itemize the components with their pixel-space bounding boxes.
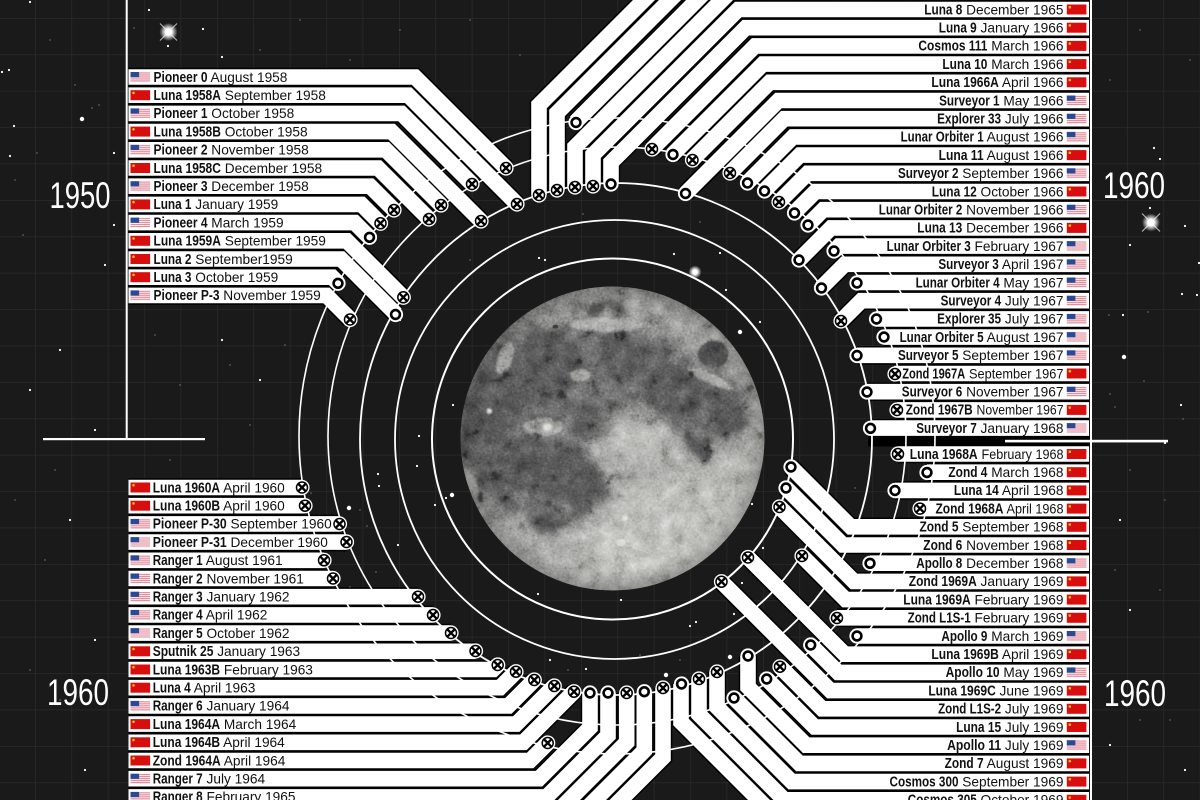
Pioneer 2: Pioneer 2 November 1958 xyxy=(154,143,309,159)
Lunar Orbiter 3: Lunar Orbiter 3 February 1967 xyxy=(887,239,1064,255)
Luna 4: Luna 4 April 1963 xyxy=(153,680,256,696)
Luna 1964B xyxy=(128,684,582,751)
Luna 3 xyxy=(128,270,346,291)
Lunar Orbiter 5: Lunar Orbiter 5 August 1967 xyxy=(900,330,1064,346)
Zond 1968A: Zond 1968A April 1968 xyxy=(935,501,1064,517)
Pioneer 4 xyxy=(128,215,377,245)
Surveyor 3 xyxy=(814,257,1089,296)
Zond L1S-1: Zond L1S-1 February 1969 xyxy=(908,611,1064,627)
Apollo 9: Apollo 9 March 1969 xyxy=(941,629,1064,645)
Explorer 33: Explorer 33 July 1966 xyxy=(937,112,1064,128)
off-page band E xyxy=(674,676,766,800)
year label: 1960 lower right: 1960 xyxy=(1104,673,1166,714)
Luna 12 xyxy=(787,184,1089,221)
Sputnik 25 xyxy=(128,643,483,660)
Pioneer 2 xyxy=(128,143,449,213)
Ranger 8 xyxy=(128,685,616,800)
Ranger 5 xyxy=(128,625,459,642)
moon xyxy=(457,286,765,591)
boundary line: left vertical xyxy=(126,0,128,440)
Surveyor 5: Surveyor 5 September 1967 xyxy=(898,348,1064,364)
Ranger 5: Ranger 5 October 1962 xyxy=(153,626,289,642)
Surveyor 6 xyxy=(859,384,1089,400)
Surveyor 1 xyxy=(678,93,1089,201)
Luna 8: Luna 8 December 1965 xyxy=(924,2,1064,18)
Zond 4: Zond 4 March 1968 xyxy=(948,465,1064,481)
Zond 1964A: Zond 1964A April 1964 xyxy=(153,753,286,769)
Zond 6: Zond 6 November 1968 xyxy=(923,538,1064,554)
Surveyor 1: Surveyor 1 May 1966 xyxy=(939,93,1064,109)
year label: 1950: 1950 xyxy=(50,175,110,216)
Pioneer P-31: Pioneer P-31 December 1960 xyxy=(153,535,328,551)
Zond 5 xyxy=(783,459,1089,536)
off-page band F xyxy=(562,685,634,800)
Luna 9: Luna 9 January 1966 xyxy=(939,20,1064,36)
Luna 1963B xyxy=(128,657,505,678)
Luna 3: Luna 3 October 1959 xyxy=(154,270,278,286)
missions 1968-1969 xyxy=(674,446,1089,800)
Zond L1S-2 xyxy=(772,659,1089,718)
Surveyor 2: Surveyor 2 September 1966 xyxy=(898,166,1064,182)
Luna 1960B: Luna 1960B April 1960 xyxy=(153,498,285,514)
Apollo 11 xyxy=(740,648,1089,754)
Sputnik 25: Sputnik 25 January 1963 xyxy=(153,644,301,660)
Pioneer 1 xyxy=(128,106,480,192)
Apollo 10 xyxy=(803,637,1089,681)
Lunar Orbiter 2: Lunar Orbiter 2 November 1966 xyxy=(879,202,1064,218)
Luna 1964B: Luna 1964B April 1964 xyxy=(153,735,285,751)
Surveyor 4: Surveyor 4 July 1967 xyxy=(941,294,1064,310)
Luna 13: Luna 13 December 1966 xyxy=(917,221,1064,237)
Luna 11 xyxy=(757,148,1089,199)
Zond 1969A: Zond 1969A January 1969 xyxy=(909,574,1064,590)
Pioneer P-3 xyxy=(128,288,358,327)
Explorer 35: Explorer 35 July 1967 xyxy=(937,312,1064,328)
Ranger 6 xyxy=(128,672,542,715)
Zond L1S-2: Zond L1S-2 July 1969 xyxy=(938,702,1064,718)
Luna 14 xyxy=(887,483,1089,499)
Lunar Orbiter 1 xyxy=(740,130,1089,191)
Pioneer 3 xyxy=(128,179,402,218)
Ranger 2: Ranger 2 November 1961 xyxy=(153,571,304,587)
Ranger 3: Ranger 3 January 1962 xyxy=(153,590,289,606)
star sparkle upper left xyxy=(160,23,178,41)
Cosmos 111 xyxy=(644,39,1089,157)
Pioneer 0 xyxy=(128,70,514,176)
Luna 1969A: Luna 1969A February 1969 xyxy=(903,592,1064,608)
Luna 15 xyxy=(759,671,1089,736)
Luna 9 xyxy=(603,20,1089,192)
Apollo 9 xyxy=(849,628,1089,645)
Apollo 8 xyxy=(862,556,1089,572)
Surveyor 4 xyxy=(833,294,1089,329)
off-page band A xyxy=(531,0,664,203)
Surveyor 3: Surveyor 3 April 1967 xyxy=(938,257,1064,273)
Ranger 4: Ranger 4 April 1962 xyxy=(153,608,267,624)
Luna 1959A xyxy=(128,234,411,305)
Luna 1958C xyxy=(128,161,437,227)
off-page band D xyxy=(567,0,1089,195)
off-page band G xyxy=(588,684,652,800)
star sparkle centre xyxy=(688,266,702,278)
Cosmos 305 xyxy=(691,671,1089,800)
Lunar Orbiter 3 xyxy=(826,239,1089,259)
decade tick right xyxy=(1005,440,1168,442)
Pioneer 3: Pioneer 3 December 1958 xyxy=(154,179,309,195)
Lunar Orbiter 1: Lunar Orbiter 1 August 1966 xyxy=(901,130,1064,146)
Zond 6 xyxy=(778,480,1089,554)
Surveyor 5 xyxy=(849,348,1089,364)
Luna 1960A: Luna 1960A April 1960 xyxy=(153,480,285,496)
missions 1960-1965 xyxy=(128,480,671,800)
orbit rings around the moon xyxy=(299,118,935,754)
missions 1958-1959 xyxy=(128,70,525,327)
Luna 10: Luna 10 March 1966 xyxy=(942,57,1064,73)
Pioneer P-3: Pioneer P-3 November 1959 xyxy=(154,288,321,304)
Luna 1969C: Luna 1969C June 1969 xyxy=(928,683,1064,699)
Surveyor 7 xyxy=(863,421,1089,437)
Zond 5: Zond 5 September 1968 xyxy=(919,520,1064,536)
Luna 1969A xyxy=(794,548,1089,608)
Pioneer 0: Pioneer 0 August 1958 xyxy=(154,70,288,86)
off-page band H xyxy=(614,680,671,800)
Explorer 33 xyxy=(722,112,1089,181)
Explorer 35 xyxy=(869,311,1089,328)
Cosmos 111: Cosmos 111 March 1966 xyxy=(918,39,1064,55)
Zond 1967B: Zond 1967B November 1967 xyxy=(906,403,1064,419)
Luna 14: Luna 14 April 1968 xyxy=(954,483,1064,499)
Surveyor 6: Surveyor 6 November 1967 xyxy=(902,384,1064,400)
Lunar Orbiter 4: Lunar Orbiter 4 May 1967 xyxy=(916,275,1064,291)
Luna 12: Luna 12 October 1966 xyxy=(932,184,1064,200)
Apollo 10: Apollo 10 May 1969 xyxy=(946,665,1064,681)
Luna 1969C xyxy=(714,574,1089,699)
Ranger 4 xyxy=(128,607,441,624)
Ranger 6: Ranger 6 January 1964 xyxy=(153,699,290,715)
Ranger 7: Ranger 7 July 1964 xyxy=(153,772,265,788)
Lunar Orbiter 4 xyxy=(849,275,1089,291)
year label: 1960 lower left: 1960 xyxy=(47,672,109,713)
Cosmos 300: Cosmos 300 September 1969 xyxy=(889,774,1064,790)
Apollo 11: Apollo 11 July 1969 xyxy=(947,738,1064,754)
Luna 1958B: Luna 1958B October 1958 xyxy=(154,124,308,140)
Zond L1S-1 xyxy=(829,610,1089,627)
Luna 1969B: Luna 1969B April 1969 xyxy=(931,647,1064,663)
Surveyor 2 xyxy=(771,166,1089,210)
Luna 4 xyxy=(128,664,524,696)
Zond 7: Zond 7 August 1969 xyxy=(945,756,1064,772)
Zond 1964A xyxy=(128,735,555,769)
Surveyor 7: Surveyor 7 January 1968 xyxy=(916,421,1064,437)
Ranger 1: Ranger 1 August 1961 xyxy=(153,553,283,569)
decade tick left xyxy=(43,438,205,440)
Apollo 8: Apollo 8 December 1968 xyxy=(916,556,1064,572)
Luna 1958C: Luna 1958C December 1958 xyxy=(154,161,322,177)
Ranger 1 xyxy=(128,553,332,569)
Luna 2 xyxy=(128,252,403,322)
Luna 1964A xyxy=(128,678,562,733)
Luna 1959A: Luna 1959A September 1959 xyxy=(154,234,326,250)
Luna 2: Luna 2 September1959 xyxy=(154,252,293,268)
Luna 13 xyxy=(791,221,1089,268)
Ranger 2 xyxy=(128,571,341,587)
Luna 1 xyxy=(128,197,388,231)
Lunar Orbiter 2 xyxy=(800,202,1089,233)
missions 1965-1968 xyxy=(531,0,1089,437)
Luna 1958B xyxy=(128,124,489,229)
Luna 15: Luna 15 July 1969 xyxy=(956,720,1064,736)
Luna 10 xyxy=(665,57,1089,162)
Luna 1964A: Luna 1964A March 1964 xyxy=(153,717,297,733)
Luna 1: Luna 1 January 1959 xyxy=(154,197,278,213)
Luna 11: Luna 11 August 1966 xyxy=(939,148,1064,164)
Pioneer 4: Pioneer 4 March 1959 xyxy=(154,215,284,231)
Zond 1967A: Zond 1967A September 1967 xyxy=(902,366,1064,382)
Cosmos 300 xyxy=(709,664,1089,790)
Luna 1960B xyxy=(128,498,313,514)
year label: 1960 upper right: 1960 xyxy=(1103,165,1165,206)
Ranger 3 xyxy=(128,589,426,606)
boundary line: right vertical xyxy=(1090,0,1092,800)
Ranger 7 xyxy=(128,685,598,788)
Pioneer 1: Pioneer 1 October 1958 xyxy=(154,106,295,122)
Luna 1966A xyxy=(685,75,1089,168)
Zond 7 xyxy=(726,690,1089,772)
off-page band C xyxy=(568,0,717,130)
Luna 8 xyxy=(585,2,1089,194)
Zond 1969A xyxy=(772,499,1089,590)
Luna 1968A: Luna 1968A February 1968 xyxy=(910,447,1064,463)
Luna 1966A: Luna 1966A April 1966 xyxy=(931,75,1064,91)
Luna 1963B: Luna 1963B February 1963 xyxy=(153,662,313,678)
Luna 1958A: Luna 1958A September 1958 xyxy=(154,88,326,104)
Luna 1958A xyxy=(128,88,525,212)
off-page band B xyxy=(549,0,690,198)
Zond 4 xyxy=(919,465,1089,481)
Pioneer P-30: Pioneer P-30 September 1960 xyxy=(153,517,332,533)
star sparkle right xyxy=(1142,214,1160,232)
Luna 1969B xyxy=(740,550,1089,663)
